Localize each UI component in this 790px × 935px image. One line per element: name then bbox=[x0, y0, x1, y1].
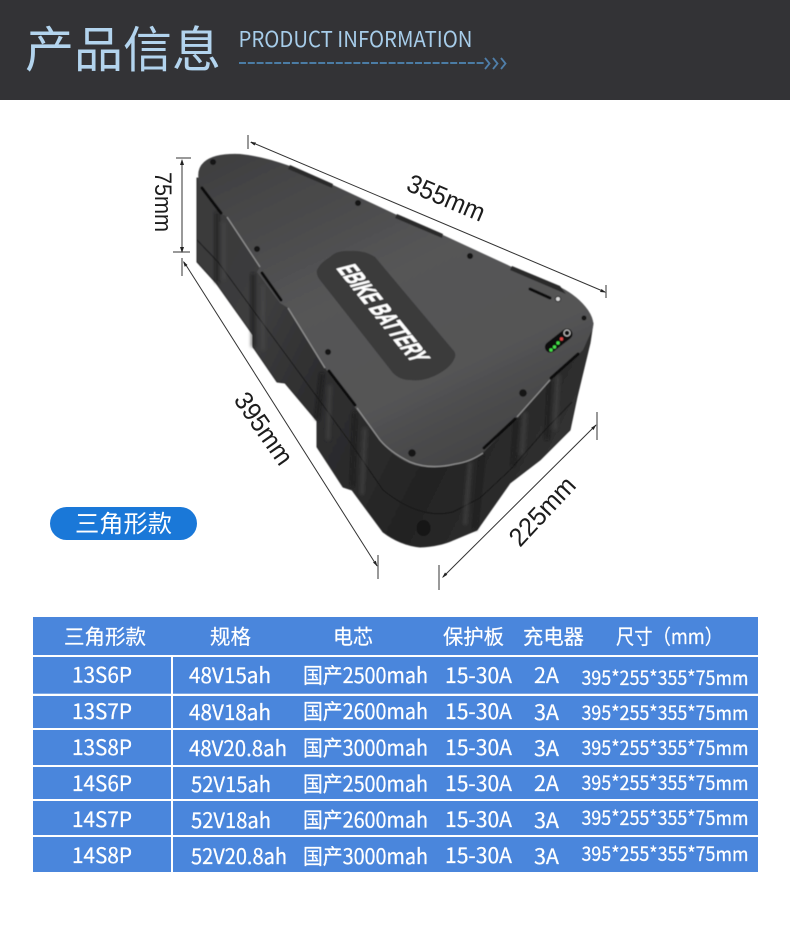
header banner bbox=[0, 0, 790, 100]
small metal button bbox=[556, 296, 560, 302]
battery body side walls bbox=[197, 178, 593, 547]
table header row: 尺寸（mm） bbox=[616, 620, 723, 650]
lower case seam bbox=[197, 240, 572, 514]
row: 13S6P: 2A bbox=[534, 660, 559, 690]
row: 13S7P: 15-30A bbox=[445, 696, 512, 726]
row: 13S7P bbox=[33, 696, 758, 728]
row: 14S6P: 2A bbox=[534, 768, 559, 798]
row: 13S7P: 48V18ah bbox=[189, 697, 271, 727]
row: 14S7P: 395*255*355*75mm bbox=[582, 802, 748, 831]
row: 14S6P: 14S6P bbox=[72, 768, 132, 798]
row: 13S8P: 48V20.8ah bbox=[189, 733, 287, 763]
title: 产品信息 bbox=[25, 11, 221, 82]
table header row: 充电器 bbox=[523, 620, 584, 650]
row: 14S6P: 395*255*355*75mm bbox=[582, 767, 748, 796]
LED charge indicator bbox=[543, 326, 575, 355]
top plate bbox=[198, 154, 593, 468]
dashed rule with chevrons bbox=[239, 58, 506, 69]
dimension: 355mm: 355mm bbox=[403, 168, 490, 228]
row: 13S8P: 3A bbox=[534, 733, 559, 763]
row: 13S8P: 13S8P bbox=[72, 732, 132, 762]
row: 13S8P bbox=[33, 730, 758, 765]
row: 14S7P: 3A bbox=[534, 805, 559, 835]
row: 13S8P: 国产3000mah bbox=[303, 732, 428, 762]
row: 14S7P: 国产2600mah bbox=[303, 804, 428, 834]
side ribs bbox=[217, 212, 558, 530]
battery product illustration bbox=[197, 154, 593, 547]
row: 14S6P bbox=[33, 767, 758, 799]
row: 14S8P: 395*255*355*75mm bbox=[582, 838, 748, 867]
row: 13S6P: 13S6P bbox=[72, 660, 132, 690]
subtitle: PRODUCT INFORMATION bbox=[238, 22, 472, 54]
row: 13S6P: 15-30A bbox=[445, 660, 512, 690]
charge port bbox=[416, 520, 430, 536]
row: 14S8P: 国产3000mah bbox=[303, 841, 428, 871]
pill label: 三角形款 bbox=[75, 504, 172, 539]
row: 13S8P: 395*255*355*75mm bbox=[582, 732, 748, 761]
row: 13S6P: 国产2500mah bbox=[303, 660, 428, 690]
row: 14S6P: 国产2500mah bbox=[303, 768, 428, 798]
table header row bbox=[33, 617, 758, 655]
dimension: 225mm bbox=[439, 412, 597, 590]
row: 14S8P bbox=[33, 837, 758, 872]
raised tabs on upper edge bbox=[288, 165, 566, 294]
row: 14S8P: 14S8P bbox=[72, 840, 132, 870]
row: 13S7P: 国产2600mah bbox=[303, 696, 428, 726]
row: 14S7P: 52V18ah bbox=[191, 805, 271, 835]
table header row: 保护板 bbox=[443, 620, 504, 650]
row: 13S6P: 395*255*355*75mm bbox=[582, 662, 748, 691]
row: 14S6P: 52V15ah bbox=[191, 769, 271, 799]
row: 14S7P bbox=[33, 801, 758, 835]
row: 14S7P: 14S7P bbox=[72, 804, 132, 834]
top plate edge highlights bbox=[227, 217, 550, 467]
dimension: 395mm: 395mm bbox=[228, 386, 300, 471]
dimension: 75mm bbox=[149, 158, 191, 253]
row: 14S8P: 52V20.8ah bbox=[191, 841, 287, 871]
row: 13S7P: 13S7P bbox=[72, 696, 132, 726]
row: 14S8P: 3A bbox=[534, 841, 559, 871]
row: 14S7P: 15-30A bbox=[445, 804, 512, 834]
row: 14S8P: 15-30A bbox=[445, 840, 512, 870]
specification table bbox=[33, 617, 758, 872]
row: 13S8P: 15-30A bbox=[445, 732, 512, 762]
dimension: 355mm bbox=[248, 135, 606, 298]
dimension: 75mm: 75mm bbox=[149, 172, 176, 232]
row: 13S7P: 3A bbox=[534, 697, 559, 727]
row: 13S7P: 395*255*355*75mm bbox=[582, 697, 748, 726]
table header row: 电芯 bbox=[333, 620, 373, 650]
table header row: 规格 bbox=[210, 620, 251, 650]
dimension: 225mm: 225mm bbox=[502, 470, 582, 552]
dimension: 395mm bbox=[182, 258, 378, 579]
table header row: 三角形款 bbox=[64, 620, 146, 650]
row: 14S6P: 15-30A bbox=[445, 768, 512, 798]
capsule text: EBIKE BATTERY bbox=[330, 262, 437, 365]
label capsule bbox=[317, 251, 455, 380]
black slots bbox=[202, 188, 578, 448]
row: 13S6P: 48V15ah bbox=[189, 660, 271, 690]
row: 13S6P bbox=[33, 657, 758, 694]
screws bbox=[210, 159, 586, 457]
pill label bbox=[50, 504, 197, 540]
